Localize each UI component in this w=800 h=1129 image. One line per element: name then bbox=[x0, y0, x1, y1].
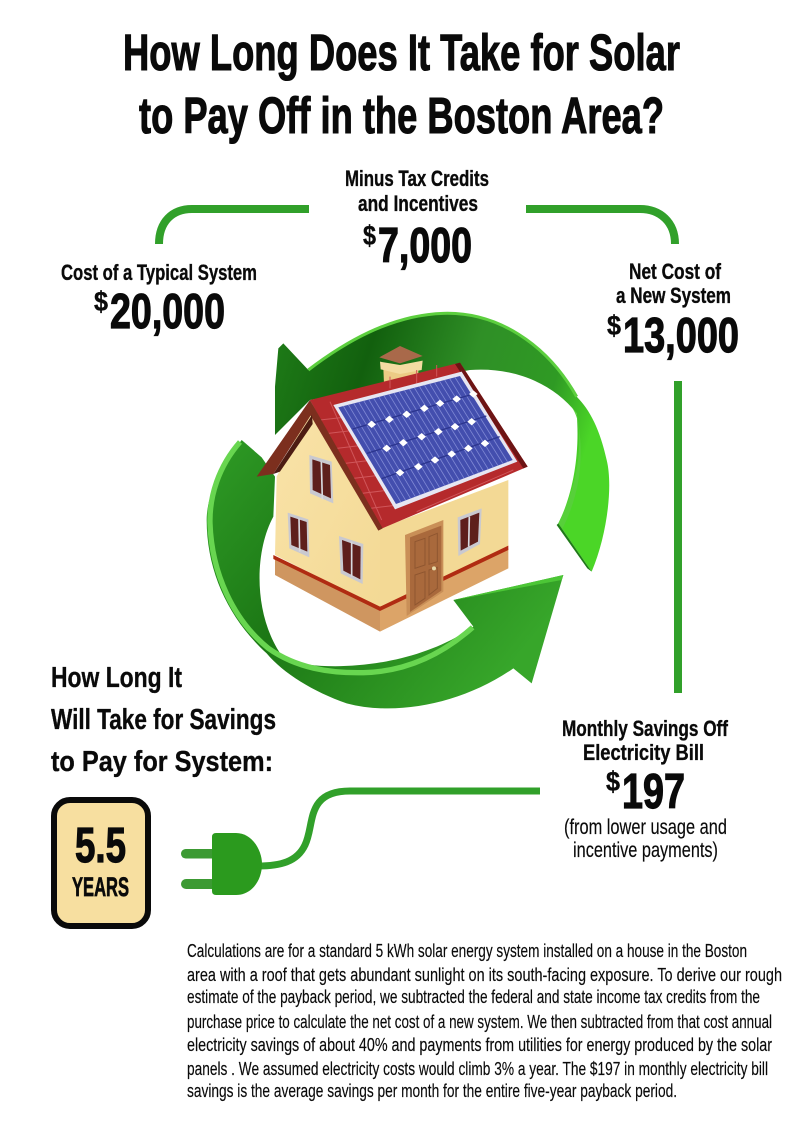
connector: net cost to savings bbox=[674, 381, 682, 693]
text block: net cost of a new system: $ bbox=[607, 310, 621, 341]
text block: minus tax credits: $ bbox=[363, 220, 376, 251]
heading: how long it will take: How Long It bbox=[51, 662, 182, 694]
heading: how long it will take: Will Take for Savings bbox=[51, 704, 276, 736]
callout: 5.5 years payback box bbox=[54, 800, 148, 926]
text block: cost of a typical system: Cost of a Typical System bbox=[61, 260, 257, 285]
text block: cost of a typical system: 20,000 bbox=[110, 285, 225, 339]
text block: monthly savings: Electricity Bill bbox=[583, 740, 704, 765]
text block: cost of a typical system: $ bbox=[94, 286, 108, 317]
callout: 5.5 years payback box: 5.5 bbox=[75, 819, 126, 873]
text block: minus tax credits bbox=[345, 166, 489, 273]
text block: monthly savings: 197 bbox=[622, 765, 685, 819]
roof bbox=[257, 363, 528, 531]
walls bbox=[275, 410, 380, 608]
text block: net cost of a new system bbox=[607, 259, 739, 363]
callout: 5.5 years payback box: YEARS bbox=[72, 872, 129, 902]
house bbox=[257, 346, 528, 632]
text block: minus tax credits: and Incentives bbox=[358, 191, 478, 216]
text block: net cost of a new system: a New System bbox=[616, 283, 731, 308]
text block: monthly savings bbox=[562, 716, 729, 862]
arrow: bottom curved arrow bbox=[207, 440, 563, 708]
recycling arrows and solar house illustration bbox=[207, 313, 609, 708]
windows bbox=[288, 455, 482, 584]
connector: cost to credits bbox=[159, 209, 309, 244]
text block: monthly savings: $ bbox=[606, 766, 620, 797]
connector: credits to net cost bbox=[526, 209, 675, 244]
text block: net cost of a new system: 13,000 bbox=[623, 309, 739, 363]
title bbox=[123, 24, 680, 144]
foundation bbox=[273, 546, 508, 632]
solar panel bbox=[333, 372, 517, 509]
text block: cost of a typical system bbox=[61, 260, 257, 339]
text block: monthly savings: Monthly Savings Off bbox=[562, 716, 729, 741]
text block: monthly savings: (from lower usage and bbox=[564, 816, 727, 839]
text block: methodology note bbox=[187, 941, 782, 1101]
text block: net cost of a new system: Net Cost of bbox=[629, 259, 722, 284]
text block: minus tax credits: Minus Tax Credits bbox=[345, 166, 489, 191]
door bbox=[405, 520, 443, 616]
text block: monthly savings: incentive payments) bbox=[573, 839, 718, 862]
text block: minus tax credits: 7,000 bbox=[378, 219, 472, 273]
icon: electric plug and cord bbox=[181, 791, 540, 895]
heading: how long it will take bbox=[51, 662, 276, 778]
heading: how long it will take: to Pay for System: bbox=[51, 746, 273, 778]
arrow: top curved arrow bbox=[275, 313, 609, 572]
chimney bbox=[379, 346, 423, 383]
